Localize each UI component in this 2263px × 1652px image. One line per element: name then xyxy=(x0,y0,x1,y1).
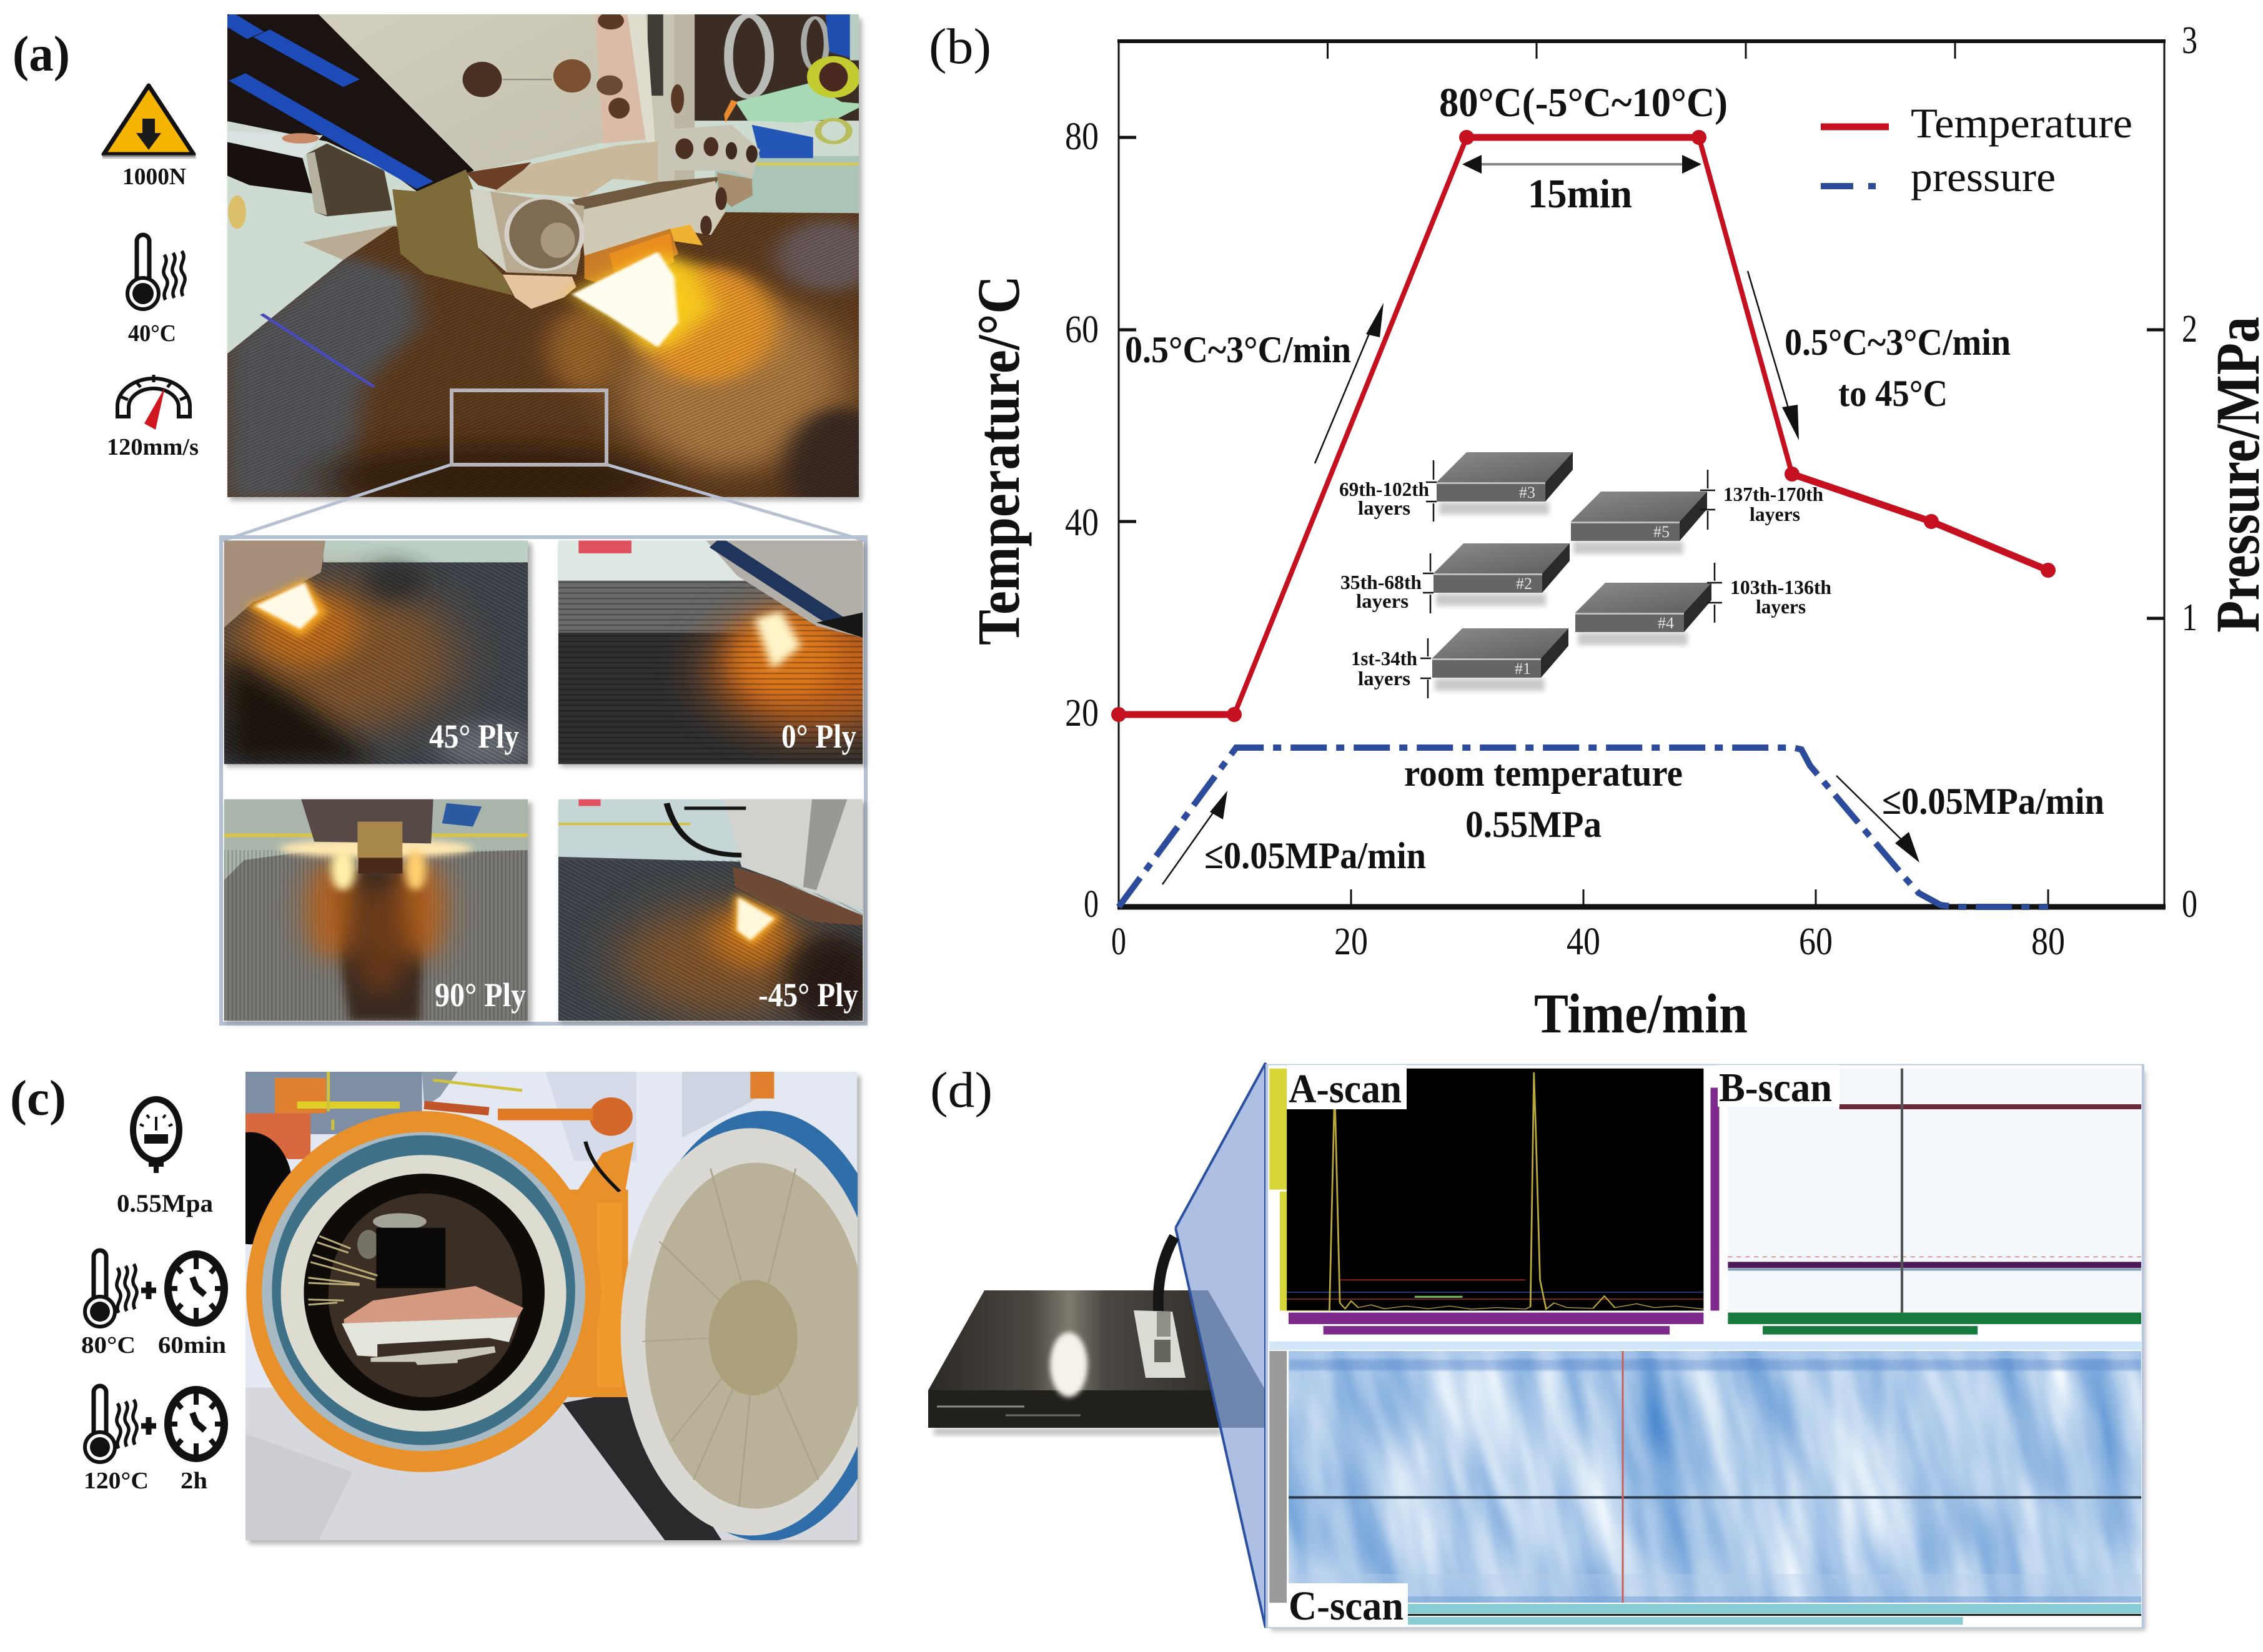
photo: open autoclave xyxy=(245,1072,858,1540)
plus xyxy=(141,1417,156,1435)
block 5 xyxy=(1571,492,1707,554)
photo shadows xyxy=(226,543,866,1024)
legend: Temperature xyxy=(1911,99,2132,147)
x axis title: Time/min xyxy=(1534,983,1748,1045)
bottom axis tick labels xyxy=(1111,921,2065,963)
block layer labels: layers xyxy=(1358,497,1410,519)
laminate sub-blocks diagram xyxy=(1339,452,1831,698)
clock xyxy=(165,1254,227,1323)
annotation: heating rate: 0.5°C~3°C/min xyxy=(1125,329,1351,370)
label 40C: 40°C xyxy=(128,320,176,347)
photo: 90 degree ply xyxy=(224,799,528,1021)
chart axes xyxy=(1117,41,2166,907)
C-scan left scale xyxy=(1269,1351,1287,1603)
A-scan label: A-scan xyxy=(1289,1066,1402,1112)
annotation: 0.55MPa: 0.55MPa xyxy=(1465,804,1602,845)
annotation: cooling rate: 0.5°C~3°C/min xyxy=(1785,322,2011,363)
block 4: #4 xyxy=(1658,614,1674,632)
arrow: pressurising direction xyxy=(1162,791,1227,884)
icon: force warning triangle xyxy=(102,86,196,159)
labels 120C and 2h: 2h xyxy=(181,1468,207,1494)
left axis tick labels: 80 xyxy=(1065,116,1099,158)
ultrasonic probe xyxy=(1134,1310,1186,1378)
right axis tick labels xyxy=(2182,19,2197,926)
carbon panel xyxy=(928,1290,1265,1435)
plus xyxy=(141,1282,156,1299)
annotation: 15min: 15min xyxy=(1528,171,1632,217)
legend: pressure xyxy=(1911,153,2056,200)
block layer labels: layers xyxy=(1756,595,1806,618)
panel shadow xyxy=(1271,1071,2146,1631)
C-scan bottom scales xyxy=(1408,1604,2141,1625)
icon: speed gauge xyxy=(117,375,190,430)
block 3: #3 xyxy=(1519,483,1535,502)
labels 120C and 2h xyxy=(84,1468,207,1494)
C-scan cursor lines xyxy=(1289,1496,2141,1499)
bottom axis tick labels: 60 xyxy=(1799,921,1833,963)
ply labels: 45° Ply xyxy=(429,718,519,755)
block layer labels: layers xyxy=(1750,503,1800,525)
left axis tick labels: 20 xyxy=(1065,692,1099,734)
block layer labels: 35th-68th xyxy=(1340,571,1422,593)
zoom projection wedge xyxy=(1176,1063,1265,1628)
scan panel frame xyxy=(1267,1065,2143,1628)
block layer labels: 69th-102th xyxy=(1339,478,1429,500)
photo shadow xyxy=(249,1076,861,1544)
inset rectangle xyxy=(452,390,607,465)
photo: minus 45 degree ply xyxy=(558,799,883,1027)
annotation: depressurising rate: ≤0.05MPa/min xyxy=(1882,781,2104,822)
photo: layup head on carbon plate xyxy=(227,14,859,497)
ply labels: 0° Ply xyxy=(781,718,856,755)
arrow: cooling direction xyxy=(1748,271,1799,440)
inset connector lines xyxy=(222,465,866,541)
panel a: automated layup xyxy=(12,12,922,1027)
block layer labels: 137th-170th xyxy=(1723,483,1823,505)
dimension arrow: hold time xyxy=(1462,155,1701,174)
ply labels: 90° Ply xyxy=(435,976,526,1014)
block 2 xyxy=(1434,543,1570,606)
block thickness arrows xyxy=(1420,460,1722,698)
C-scan map xyxy=(1218,1351,2221,1603)
panel d: ultrasonic inspection xyxy=(928,1063,2221,1631)
left axis tick labels xyxy=(1065,116,1099,926)
block 4 xyxy=(1575,583,1711,645)
thermometer xyxy=(85,1250,137,1327)
block layer labels xyxy=(1339,478,1831,690)
arrow: depressurising direction xyxy=(1836,776,1919,863)
label 120mm/s: 120mm/s xyxy=(107,434,199,460)
ply labels xyxy=(429,718,858,1014)
ply labels: -45° Ply xyxy=(758,976,858,1014)
right axis tick labels: 1 xyxy=(2182,596,2197,639)
temperature curve xyxy=(1111,130,2056,722)
annotation: pressurising rate: ≤0.05MPa/min xyxy=(1204,835,1426,876)
panel label c: (c) xyxy=(10,1071,66,1126)
icon: thermometer 40C xyxy=(127,235,185,309)
inset frame xyxy=(221,537,866,1024)
block layer labels: layers xyxy=(1356,590,1409,612)
annotation: to 45C: to 45°C xyxy=(1838,373,1948,414)
panel b: temperature and pressure profile chart xyxy=(929,19,2263,1045)
block 2: #2 xyxy=(1516,575,1532,593)
bottom axis tick labels: 20 xyxy=(1334,921,1368,963)
arrow: heating direction xyxy=(1315,303,1384,463)
C-scan top bar xyxy=(1269,1342,2141,1350)
labels 80C and 60min: 80°C xyxy=(81,1332,136,1358)
annotation: room temperature: room temperature xyxy=(1404,753,1683,794)
inset photo group xyxy=(209,541,922,1027)
clock xyxy=(165,1390,227,1458)
block 3 xyxy=(1437,452,1573,515)
photo shadow xyxy=(230,19,862,501)
right axis tick labels: 2 xyxy=(2182,308,2197,350)
probe cable xyxy=(1158,1237,1174,1315)
block 1: #1 xyxy=(1515,660,1531,678)
thermometer xyxy=(85,1386,137,1462)
left axis tick labels: 60 xyxy=(1065,309,1099,351)
bottom axis tick labels: 80 xyxy=(2031,921,2065,963)
block 5: #5 xyxy=(1653,523,1670,541)
B-scan label: B-scan xyxy=(1719,1065,1832,1110)
icon: pressure gauge xyxy=(133,1099,179,1173)
label 1000N: 1000N xyxy=(122,164,186,190)
block layer labels: layers xyxy=(1358,667,1410,690)
bottom axis tick labels: 0 xyxy=(1111,921,1126,963)
panel c: autoclave cure xyxy=(10,1071,896,1544)
legend xyxy=(1821,99,2132,200)
icon group: 80C plus 60min xyxy=(85,1250,227,1327)
inspection scene xyxy=(928,1063,1265,1628)
annotation: 80C hold range: 80°C(-5°C~10°C) xyxy=(1439,80,1728,126)
labels 80C and 60min: 60min xyxy=(158,1332,226,1358)
pressure curve xyxy=(1119,748,2048,907)
block 1 xyxy=(1432,628,1568,691)
bottom axis tick labels: 40 xyxy=(1567,921,1600,963)
left axis tick labels: 0 xyxy=(1084,883,1099,926)
block layer labels: 1st-34th xyxy=(1351,647,1417,670)
panel label d: (d) xyxy=(930,1063,993,1118)
label 0.55Mpa: 0.55Mpa xyxy=(117,1189,213,1217)
y axis title temperature: Temperature/°C xyxy=(965,275,1032,645)
C-scan label: C-scan xyxy=(1289,1583,1404,1629)
panel label a: (a) xyxy=(12,27,70,82)
right axis tick labels: 0 xyxy=(2182,883,2197,926)
photo: 0 degree ply xyxy=(558,541,863,764)
block layer labels: 103th-136th xyxy=(1730,576,1831,598)
B-scan window xyxy=(1711,1069,2141,1335)
panel label b: (b) xyxy=(929,19,991,74)
labels 80C and 60min xyxy=(81,1332,226,1358)
A-scan window xyxy=(1269,1069,1703,1335)
right axis tick labels: 3 xyxy=(2182,19,2197,62)
left axis tick labels: 40 xyxy=(1065,502,1099,544)
photo: 45 degree ply xyxy=(209,541,535,769)
labels 120C and 2h: 120°C xyxy=(84,1468,149,1494)
icon group: 120C plus 2h xyxy=(85,1386,227,1462)
